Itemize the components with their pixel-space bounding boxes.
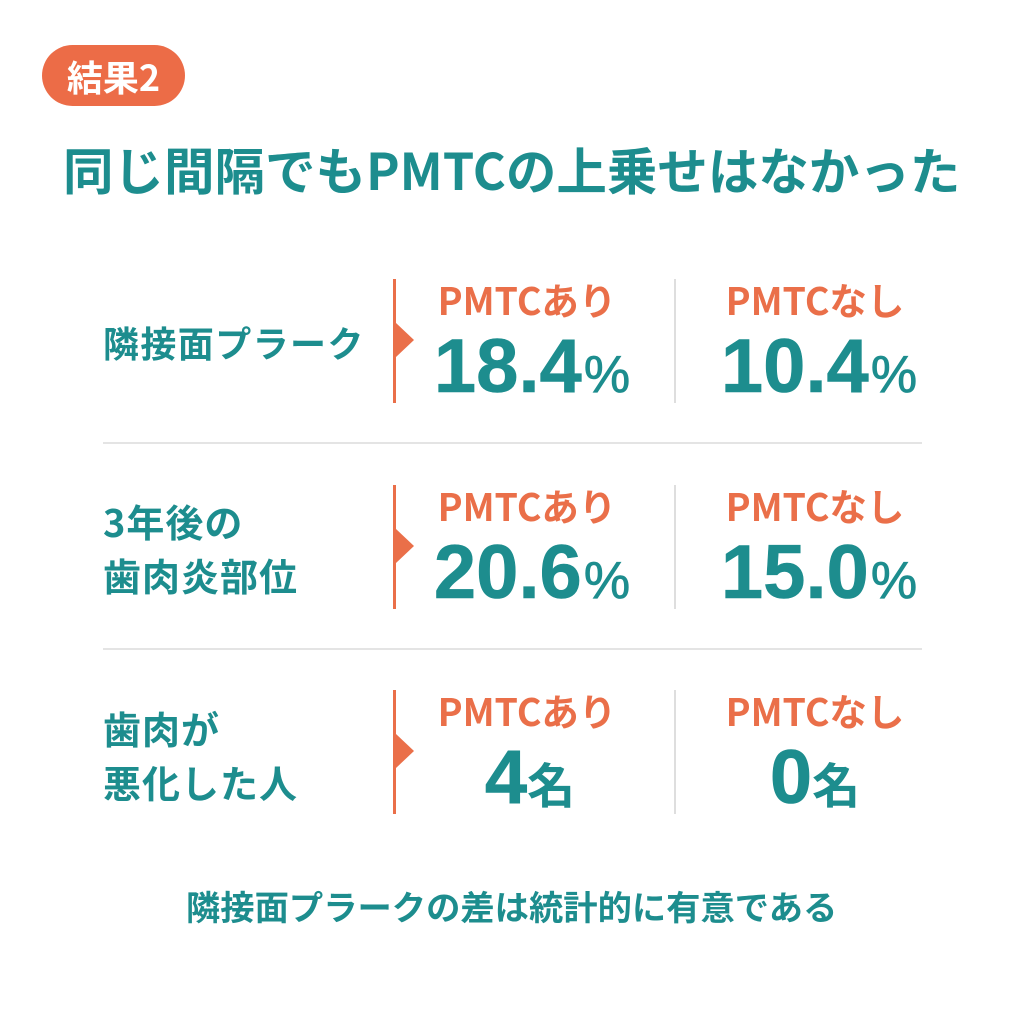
- row label: 悪化した人: [103, 754, 298, 809]
- value: 18.4%: [434, 324, 630, 409]
- column: PMTCなし: [726, 682, 904, 820]
- marker: orange bar and arrow: [393, 485, 414, 609]
- value: 20.6%: [434, 530, 630, 615]
- heading: PMTCなし: [726, 271, 904, 326]
- row label: 3年後の: [103, 493, 243, 548]
- heading: PMTCなし: [726, 682, 904, 737]
- heading: PMTCあり: [438, 271, 616, 326]
- badge: 結果2: [42, 45, 185, 106]
- value: 10.4%: [721, 324, 917, 409]
- column: PMTCあり: [434, 271, 630, 409]
- row: 隣接面プラーク: [103, 271, 917, 409]
- column: PMTCあり: [434, 477, 630, 615]
- value: 0名: [770, 735, 860, 820]
- row label: [103, 700, 298, 809]
- row label: [103, 493, 298, 602]
- value: 4名: [485, 735, 575, 820]
- row: 歯肉が悪化した人: [103, 682, 904, 820]
- title: 同じ間隔でもPMTCの上乗せはなかった: [63, 131, 960, 205]
- heading: PMTCあり: [438, 477, 616, 532]
- marker: orange bar and arrow: [393, 690, 414, 814]
- column: PMTCなし: [721, 271, 917, 409]
- column: PMTCあり: [438, 682, 616, 820]
- heading: PMTCなし: [726, 477, 904, 532]
- heading: PMTCあり: [438, 682, 616, 737]
- footnote: 隣接面プラークの差は統計的に有意である: [186, 880, 837, 930]
- row: 3年後の歯肉炎部位: [103, 477, 917, 615]
- badge: 結果2: 結果2: [67, 50, 160, 102]
- row label: 歯肉炎部位: [103, 547, 298, 602]
- row label: 歯肉が: [103, 700, 220, 755]
- value: 15.0%: [721, 530, 917, 615]
- row label: 隣接面プラーク: [103, 316, 365, 368]
- column: PMTCなし: [721, 477, 917, 615]
- marker: orange bar and arrow: [393, 279, 414, 403]
